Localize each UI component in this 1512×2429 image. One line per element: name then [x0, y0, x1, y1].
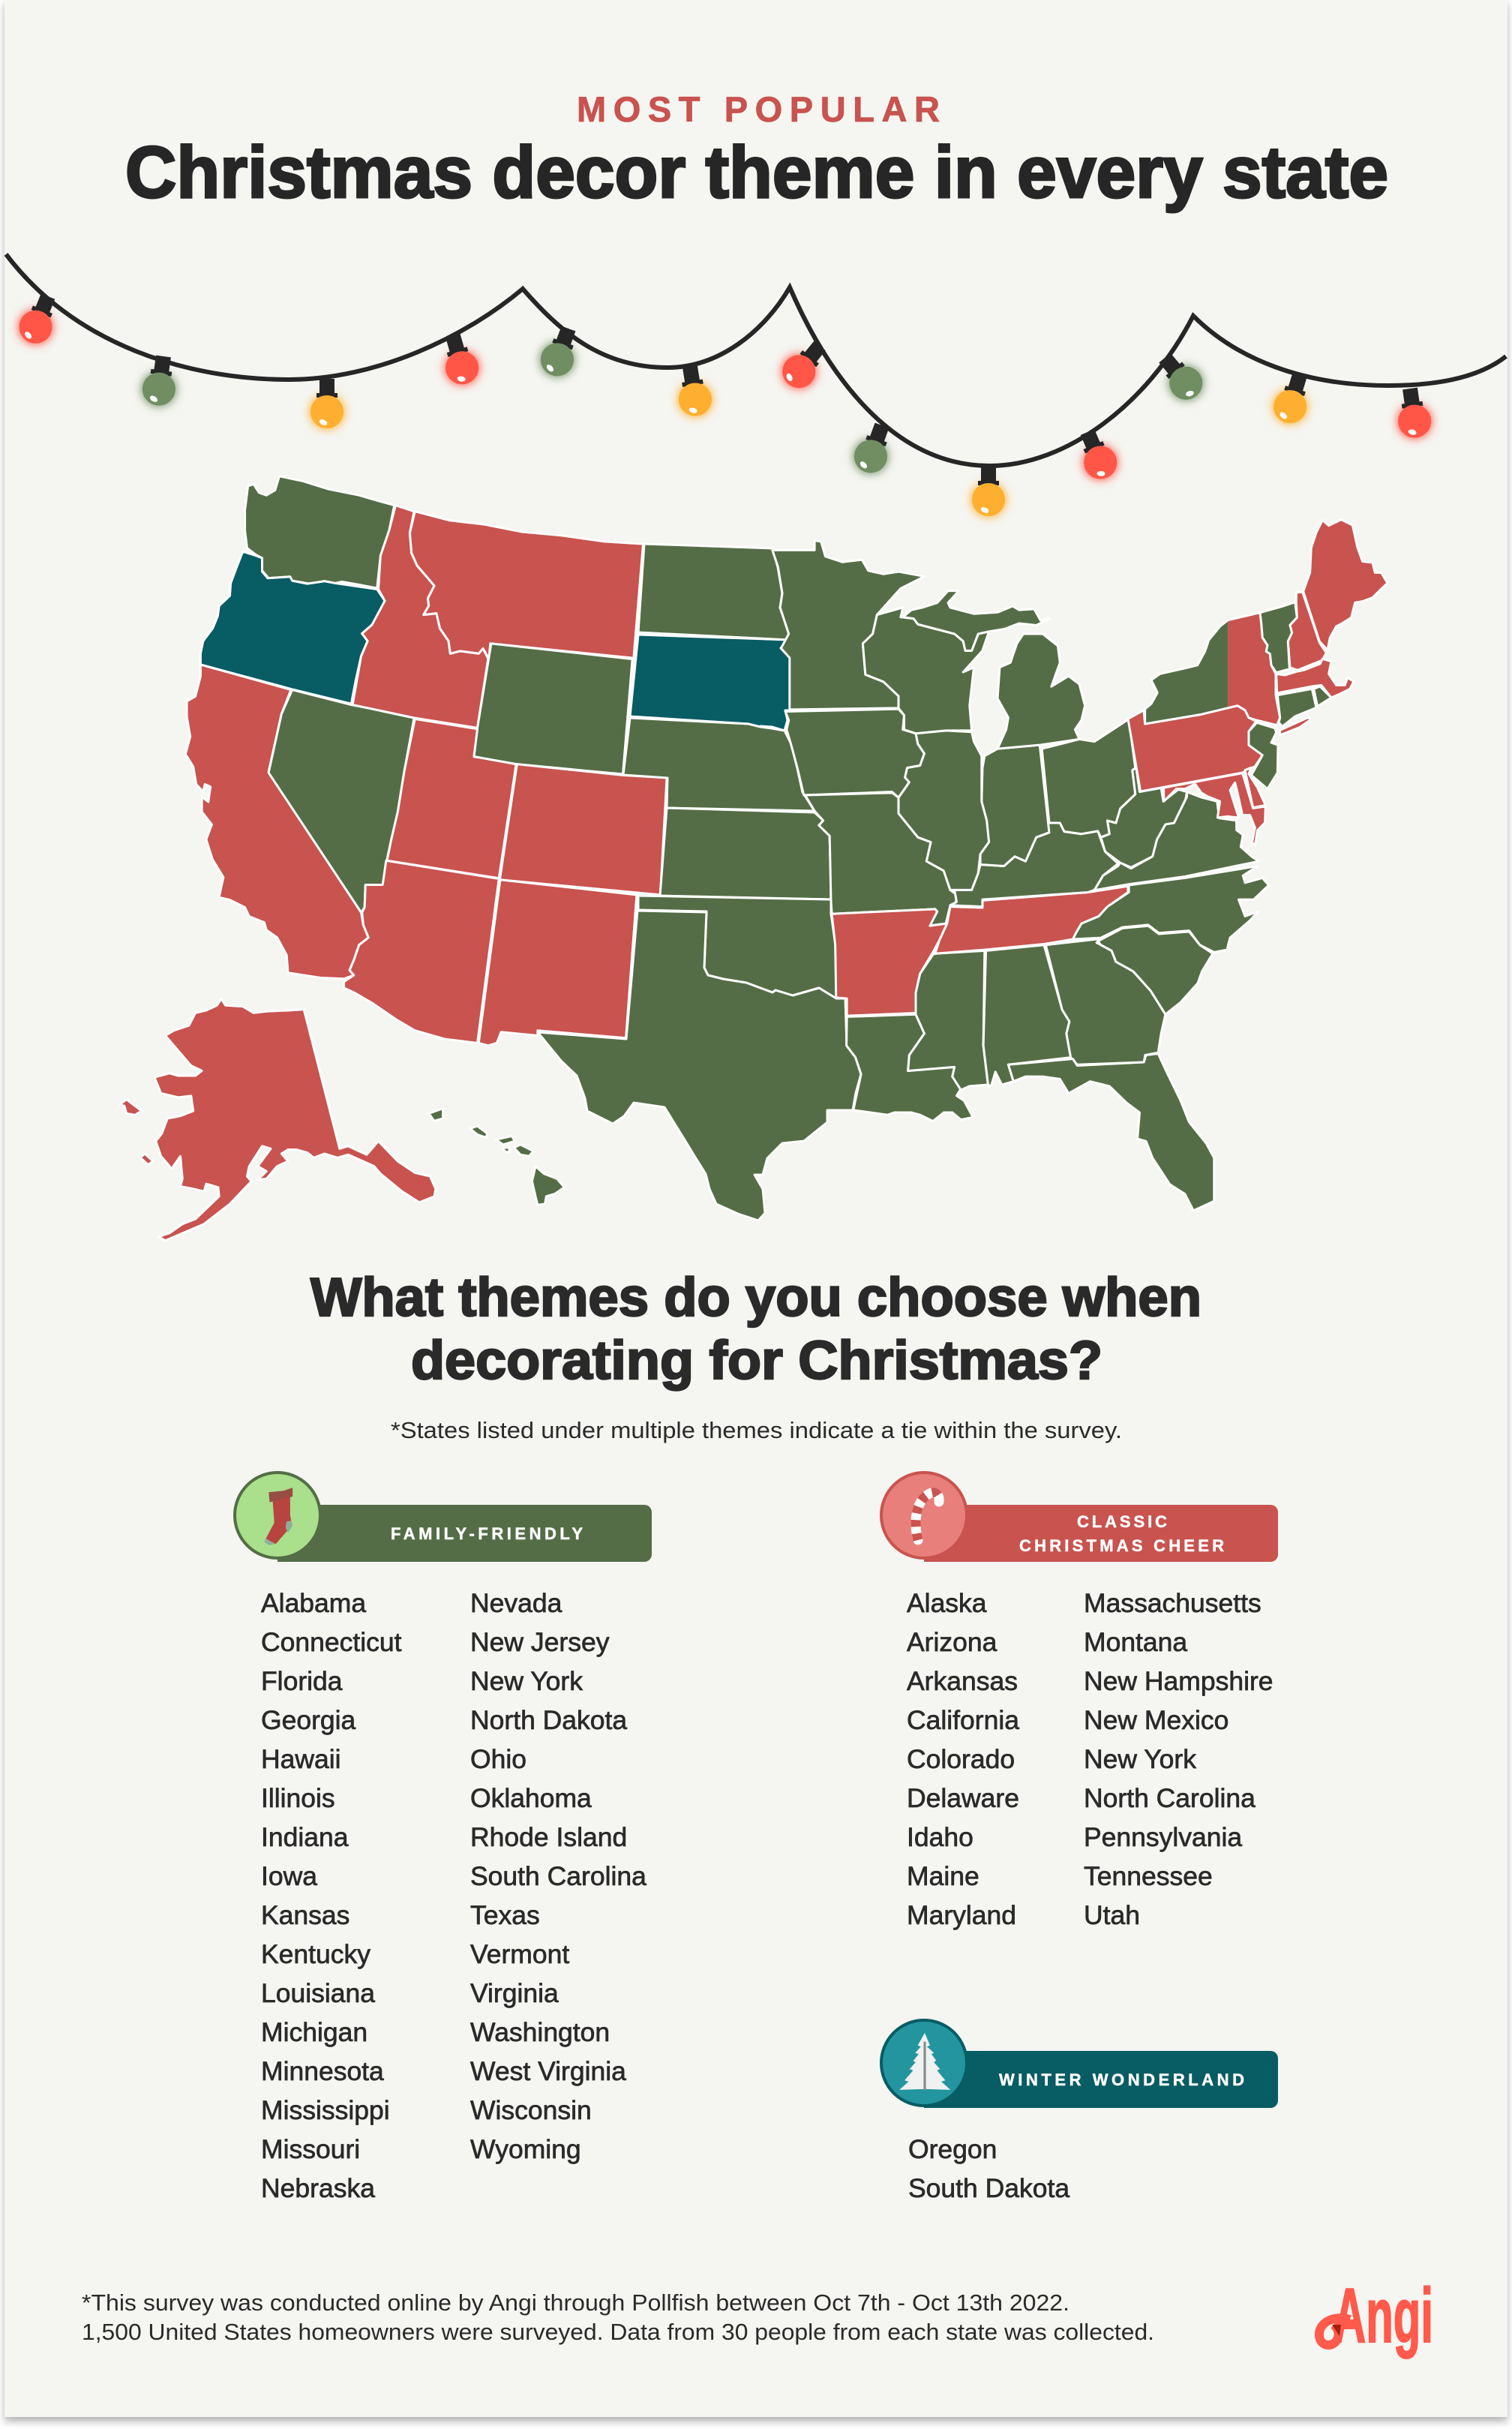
state list: column 1: Arizona [907, 1627, 998, 1657]
state: Mississippi [908, 950, 988, 1090]
state: West Virginia [1101, 768, 1187, 867]
state: Missouri [805, 793, 957, 926]
Upper Peninsula [903, 591, 1049, 650]
state list: column 2: New York [1084, 1744, 1196, 1774]
state list: column 1: Michigan [261, 2017, 368, 2047]
state list: column 1: Georgia [261, 1705, 356, 1735]
state: Delaware [1245, 767, 1265, 808]
state list: column 1: Hawaii [261, 1744, 341, 1774]
panel: classic christmas cheer [881, 1473, 1278, 1930]
New York: outline [1145, 613, 1280, 725]
banner label: CLASSIC [1077, 1512, 1167, 1531]
eastern states [772, 541, 1269, 1211]
state: Massachusetts [1276, 659, 1354, 698]
state: Rhode Island [1314, 686, 1331, 707]
banner label: CHRISTMAS CHEER [1019, 1536, 1224, 1555]
state list: column 1: Maine [907, 1861, 980, 1891]
state list: column 1: Missouri [261, 2134, 360, 2164]
section heading [310, 1268, 1202, 1391]
state list: column 1: Mississippi [261, 2095, 390, 2125]
state: Florida [1008, 1054, 1214, 1211]
state: Pennsylvania [1128, 706, 1262, 791]
state list: column 1: Kansas [261, 1900, 350, 1930]
banner: classic christmas cheer [924, 1505, 1278, 1562]
bulb: red [1072, 425, 1123, 485]
bulb: green [848, 419, 898, 479]
heading line 2: decorating for Christmas? [411, 1331, 1102, 1391]
state: Nebraska [623, 718, 814, 811]
state: Alabama [983, 945, 1071, 1086]
state list: column 2: Montana [1084, 1627, 1187, 1657]
Hawaii: Kauai [429, 1109, 443, 1121]
state list: column 1: California [907, 1705, 1019, 1735]
state list: column 2: Wyoming [470, 2134, 581, 2164]
state list: column 2 [470, 1588, 646, 2164]
state: Oregon [200, 551, 385, 704]
state: Maine [1304, 520, 1388, 650]
title: Christmas decor theme in every state [125, 131, 1388, 213]
state list: column 1: Louisiana [261, 1978, 375, 2008]
string of lights [6, 254, 1506, 517]
state: Washington [245, 476, 394, 588]
state: Georgia [1046, 938, 1166, 1064]
panel: family-friendly [235, 1473, 652, 2203]
state list: column 1: Delaware [907, 1783, 1019, 1813]
banner label [1019, 1512, 1224, 1555]
state list: column 1: Minnesota [261, 2056, 384, 2086]
icon: snowy tree [881, 2020, 967, 2106]
icon: stocking [235, 1473, 320, 1558]
state list: column 2: New Jersey [470, 1627, 610, 1657]
bulb: green [535, 323, 585, 382]
state: Wyoming [474, 644, 632, 774]
state: Arizona [344, 860, 499, 1043]
state: Montana [410, 512, 644, 659]
state: North Carolina [1072, 866, 1269, 952]
bulb: green [140, 354, 181, 409]
footnote line 2: 1,500 United States homeowners were surveyed. Data from 30 people from each state was collected. [82, 2319, 1154, 2345]
state: Alaska [120, 999, 436, 1241]
state list: column 2: Vermont [470, 1939, 569, 1969]
state: Wisconsin [862, 608, 989, 734]
bulb: orange [971, 467, 1006, 517]
state list: column 2: Washington [470, 2017, 610, 2047]
state: New Jersey [1249, 722, 1278, 789]
Alaska mainland [154, 999, 436, 1241]
state list: column 1: Idaho [907, 1822, 974, 1852]
state list: column 2: Texas [470, 1900, 540, 1930]
state: Kansas [660, 808, 832, 899]
state: Hawaii [429, 1109, 564, 1205]
state list: column 1: Maryland [907, 1900, 1016, 1930]
Hawaii: Big Island [532, 1166, 564, 1205]
state list: column 1: Alabama [261, 1588, 366, 1618]
panel: winter wonderland [881, 2020, 1278, 2203]
state list: column 1: Kentucky [261, 1939, 370, 1969]
Hawaii: Maui [514, 1145, 533, 1156]
state list [908, 2134, 1070, 2203]
state: Vermont [1260, 602, 1297, 673]
state list: column 2: Utah [1084, 1900, 1140, 1930]
state list: column 2: New Mexico [1084, 1705, 1228, 1735]
state list: column 1: Arkansas [907, 1666, 1018, 1696]
state: Louisiana [847, 1014, 973, 1121]
state: Arkansas [832, 909, 947, 1016]
Hawaii: Oahu [470, 1126, 488, 1137]
state: New Hampshire [1288, 592, 1326, 670]
state: Iowa [785, 709, 924, 797]
state list: column 1: Florida [261, 1666, 343, 1696]
Hawaii: Lanai [503, 1148, 510, 1153]
New York: Long Island [1280, 717, 1310, 735]
state: Oklahoma [638, 896, 836, 998]
bulb: orange [673, 364, 715, 419]
tie note: *States listed under multiple themes indicate a tie within the survey. [391, 1417, 1122, 1443]
state list: column 1 [907, 1588, 1019, 1930]
logo: Angi [1319, 2272, 1433, 2358]
state: Kentucky [950, 823, 1118, 907]
icon: candy cane [881, 1473, 967, 1558]
bulb: red [1393, 386, 1434, 441]
state list: column 2: New York [470, 1666, 583, 1696]
state list: column 1 [261, 1588, 402, 2203]
New York: green half [1145, 620, 1228, 724]
state: Michigan [903, 591, 1085, 749]
bulb: orange [310, 379, 344, 429]
state list: column 2: West Virginia [470, 2056, 626, 2086]
footnote line 1: *This survey was conducted online by Angi through Pollfish between Oct 7th - Oct 13th 2022. [82, 2289, 1070, 2316]
western states [120, 476, 667, 1241]
state list: column 2: Massachusetts [1084, 1588, 1262, 1618]
state list: column 2: South Carolina [470, 1861, 646, 1891]
state: New Mexico [478, 880, 637, 1046]
logo: Angi: Angi [1334, 2272, 1433, 2358]
northeastern states [1128, 520, 1388, 845]
state: Minnesota [772, 541, 924, 710]
bulb: red [14, 290, 64, 350]
wire [6, 254, 1506, 466]
eyebrow heading: MOST POPULAR [577, 89, 940, 129]
state list: column 2: Ohio [470, 1744, 526, 1774]
state: South Carolina [1098, 926, 1213, 1014]
state: Tennessee [935, 886, 1128, 953]
state list: column 1: Illinois [261, 1783, 335, 1813]
Hawaii: Molokai [496, 1136, 514, 1145]
bulb: red [436, 332, 484, 389]
state list: South Dakota [908, 2173, 1070, 2203]
bulb: red [775, 335, 833, 396]
footnote [82, 2289, 1154, 2345]
Alaska island [140, 1154, 153, 1165]
state: Illinois [898, 731, 989, 890]
state list: column 1: Nebraska [261, 2173, 375, 2203]
state list: column 1: Colorado [907, 1744, 1015, 1774]
state: Maryland [1164, 773, 1265, 845]
heading line 1: What themes do you choose when [310, 1268, 1202, 1328]
state: Connecticut [1277, 689, 1316, 726]
banner: winter wonderland [924, 2051, 1278, 2108]
Lower Peninsula [998, 634, 1085, 749]
state list: column 2: New Hampshire [1084, 1666, 1274, 1696]
bulb: green [1151, 347, 1210, 407]
state list: column 2: Rhode Island [470, 1822, 627, 1852]
state: Texas [538, 911, 861, 1221]
state list: column 1: Connecticut [261, 1627, 402, 1657]
banner label: FAMILY-FRIENDLY [391, 1524, 583, 1543]
Alaska island [120, 1100, 142, 1115]
state list: column 1: Alaska [907, 1588, 987, 1618]
state: Idaho [352, 506, 488, 728]
state: Colorado [500, 764, 667, 895]
New York: red half [1228, 613, 1280, 725]
state list: column 1: Iowa [261, 1861, 317, 1891]
state: Utah [387, 719, 516, 878]
state list: column 2: Tennessee [1084, 1861, 1213, 1891]
state: North Dakota [638, 544, 789, 640]
state list: column 2: Pennsylvania [1084, 1822, 1242, 1852]
map of US states by theme [120, 476, 1388, 1241]
state list: Oregon [908, 2134, 997, 2164]
state list: column 2 [1084, 1588, 1274, 1930]
state: Ohio [1042, 719, 1136, 837]
state list: column 2: Nevada [470, 1588, 562, 1618]
banner: family-friendly [278, 1505, 652, 1562]
state list: column 2: Virginia [470, 1978, 559, 2008]
bulb: orange [1268, 370, 1316, 428]
state: California [185, 665, 368, 979]
state list: column 2: North Dakota [470, 1705, 627, 1735]
state: South Dakota [630, 635, 790, 731]
state list: column 2: Wisconsin [470, 2095, 592, 2125]
state list: column 2: North Carolina [1084, 1783, 1256, 1813]
banner label: WINTER WONDERLAND [999, 2070, 1244, 2089]
state: New York (tie) [1145, 613, 1310, 735]
state list: column 1: Indiana [261, 1822, 349, 1852]
state: Virginia [1088, 792, 1258, 891]
state: Indiana [980, 745, 1049, 866]
state: Nevada [268, 689, 414, 912]
state list: column 2: Oklahoma [470, 1783, 592, 1813]
